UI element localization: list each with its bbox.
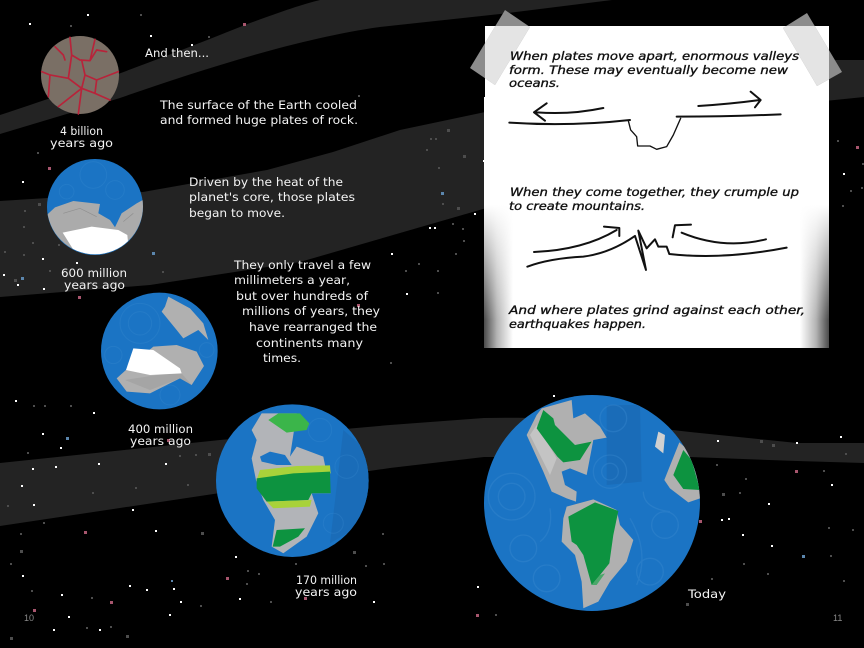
label: 600 million years ago [61,266,127,292]
label: 400 million years ago: 400 million [128,422,193,436]
label: 600 million years ago: years ago [64,278,125,292]
label: 170 million years ago: years ago [295,585,357,599]
diagram: mountains [527,225,787,270]
diagram: valley [509,92,781,149]
text: millimeters a year: They only travel a few [233,258,371,272]
text: plates began to move: began to move. [189,206,285,220]
tape left [470,10,530,85]
text: millimeters a year: have rearranged the [249,320,377,334]
text: millimeters a year [233,258,380,365]
note text: earthquakes [508,303,805,331]
note text: coming together [509,185,799,213]
label: 4 billion years ago: years ago [50,136,113,150]
planet: 170 million years ago [216,404,370,557]
label: 4 billion years ago [50,124,113,150]
text: surface cooled [159,98,358,127]
tape right [783,13,842,86]
caption: and then: And then... [145,46,209,60]
planet: today [484,395,700,611]
note text: moving apart: oceans. [509,76,560,90]
note text: earthquakes: And where plates grind against each other, [508,303,805,317]
page number right: 11 [833,613,842,623]
note text: coming together: When they come together, they crumple up [510,185,799,199]
text: plates began to move: planet's core, those plates [189,190,355,204]
page number left: 10 [24,613,34,623]
text: millimeters a year: but over hundreds of [236,289,369,303]
planet: 600 million years ago [45,159,144,257]
text: millimeters a year: continents many [256,336,363,350]
label: today: Today [687,587,726,601]
text: millimeters a year: millions of years, they [242,304,380,318]
note text: coming together: to create mountains. [509,199,645,213]
label: 4 billion years ago: 4 billion [60,124,103,138]
label: 400 million years ago: years ago [130,434,191,448]
text: surface cooled: and formed huge plates of rock. [160,113,358,127]
note text: moving apart [509,49,799,90]
note text: moving apart: form. These may eventually become new [509,63,789,77]
note text: moving apart: When plates move apart, enormous valleys [510,49,799,63]
text: millimeters a year: times. [263,351,301,365]
planet: 4 billion years ago [41,36,119,114]
planet: 400 million years ago [101,293,218,409]
label: 170 million years ago: 170 million [296,573,357,587]
panel: plate movement note [470,10,842,348]
text: plates began to move: Driven by the heat of the [189,175,343,189]
label: 400 million years ago [128,422,193,448]
label: 600 million years ago: 600 million [61,266,127,280]
text: millimeters a year: millimeters a year, [234,273,350,287]
text: plates began to move [189,175,355,220]
paper sheet [484,26,829,348]
text: surface cooled: The surface of the Earth cooled [159,98,357,112]
note text: earthquakes: earthquakes happen. [509,317,646,331]
label: 170 million years ago [295,573,357,599]
